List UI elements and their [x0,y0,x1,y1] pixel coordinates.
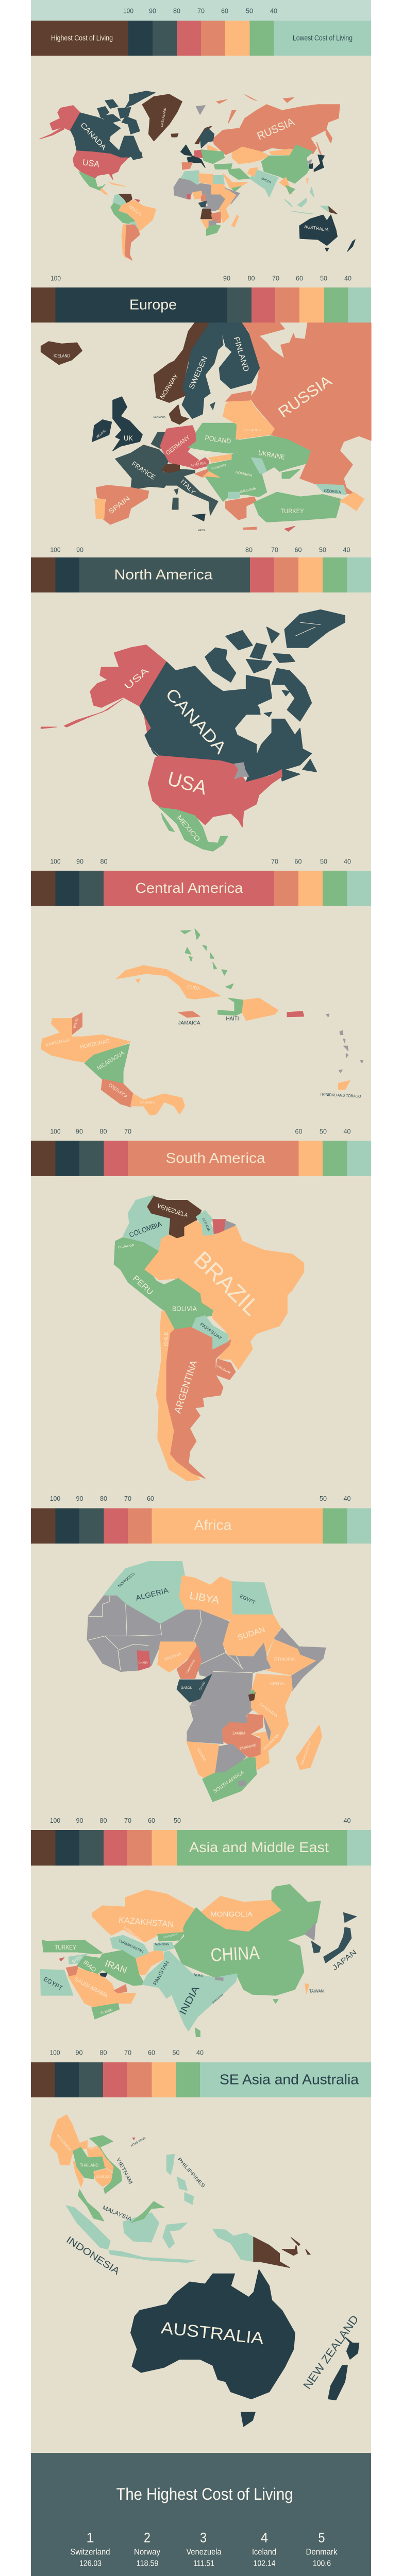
highest list row 1: Venezuela [187,2547,222,2556]
highest list row 1: 102.14 [254,2560,276,2568]
Central America country labels: JAMAICA [178,1020,200,1026]
Asia country labels: INDIA [178,1984,202,2016]
panel: the highest cost of living: The Highest Cost of Living [116,2485,293,2503]
section bar: North America: 40 [343,546,350,553]
Europe country labels: NORWAY [158,372,180,400]
Europe country labels: SWEDEN [187,355,209,390]
SE Asia and Australia countries [66,2201,359,2427]
SE Asia and Australia labels: VIETNAM [115,2157,133,2185]
Asia country labels: SAUDI ARABIA [73,1976,109,1999]
section bar: North America [31,546,371,592]
Asia country labels: TAIWAN [309,1989,324,1994]
section bar: Central America [31,857,371,906]
map: Central America [41,929,363,1115]
world country labels: BRAZIL [128,205,143,217]
world country labels: GREENLAND [161,107,167,127]
section bar: North America: 50 [319,546,326,553]
Central America country labels: COSTA RICA [108,1082,128,1099]
section bar: Africa: 50 [320,1495,327,1502]
South America country labels [118,1202,265,1415]
South America country labels: VENEZUELA [156,1202,189,1219]
Africa country labels: CAMEROON [186,1659,196,1674]
SE Asia and Australia labels [56,2134,361,2392]
world country labels: AUSTRALIA [304,224,329,232]
legend: colour bar: Highest Cost of Living [51,34,113,42]
Africa country labels: ZIMBABWE [239,1743,257,1751]
SE Asia and Australia labels: AUSTRALIA [160,2318,264,2348]
South America country labels: BRAZIL [189,1246,265,1321]
South America country labels: CHILE [164,1332,169,1346]
Europe country labels: UKRAINE [258,449,286,461]
Asia country labels: EGYPT [42,1975,64,1992]
section bar: Africa [31,1495,371,1544]
South America country labels: ARGENTINA [172,1359,200,1415]
legend: top scale numbers: 80 [173,7,180,14]
map: South America [114,1195,304,1481]
section bar: Central America: 100 [51,857,61,866]
SE Asia and Australia labels: MYANMAR [56,2134,72,2153]
map: Africa [87,1562,326,1802]
section bar: South America: 50 [320,1127,327,1136]
section bar: North America: 90 [76,546,83,553]
Africa country labels: NAMIBIA [196,1748,207,1762]
Central America country labels: HONDURAS [79,1038,110,1050]
Europe country labels: SPAIN [107,495,131,515]
Africa country labels: MADAGASCAR [300,1741,312,1766]
section bar: Central America: 60 [295,857,302,866]
section bar: Asia and Middle East: Asia and Middle East [189,1839,329,1855]
section bar: Europe: 50 [320,274,327,282]
legend: colour bar [31,21,371,56]
Africa country labels: GHANA [139,1662,148,1665]
Central America country labels: PANAMA [140,1101,155,1105]
section bar: SE Asia and Australia: 50 [172,2048,179,2057]
section bar: SE Asia and Australia: 70 [124,2048,131,2057]
section bar: Central America: Central America [135,880,243,896]
SE Asia and Australia labels: CAMBODIA [96,2176,111,2179]
Europe country labels: UK [124,434,133,442]
map: world overview [40,91,355,260]
section bar: Africa: 80 [100,1495,107,1502]
Central America countries [41,929,363,1115]
panel: the highest cost of living [31,2453,371,2576]
Asia country labels [42,1910,358,2016]
North America country labels: CANADA [162,684,230,757]
Central America country labels: BELIZE [73,1017,79,1029]
Africa country labels: GABON [181,1687,192,1690]
South America country labels: PARAGUAY [199,1321,223,1341]
section bar: Central America: 90 [76,857,83,866]
world country labels [79,107,329,232]
Europe countries [41,323,371,531]
section bar: South America: 100 [51,1127,61,1136]
Central America country labels [45,984,361,1105]
Africa country labels: EGYPT [239,1594,256,1606]
section bar: Europe: 40 [344,274,351,282]
North America country labels: USA [123,666,150,691]
highest list row 1: 3 [200,2530,207,2545]
legend: top scale numbers: 90 [149,7,156,14]
section bar: South America: 40 [343,1127,350,1136]
SE Asia and Australia labels: INDONESIA [64,2234,122,2277]
Africa country labels: KENYA [270,1683,284,1686]
Asia country labels: KYRGYZSTAN [163,1933,178,1940]
section bar: Asia and Middle East: 100 [50,1817,60,1824]
Asia country labels: TAJIKISTAN [155,1943,169,1946]
Europe country labels: CZECH REP [194,451,211,455]
Europe country labels: HUNGARY [211,464,227,471]
South America country labels: ECUADOR [118,1244,135,1249]
Asia country labels: PAKISTAN [153,1960,170,1986]
highest list row 1: Iceland [252,2547,276,2556]
legend: colour bar: Lowest Cost of Living [293,34,353,42]
highest list row 1: Denmark [306,2547,338,2556]
Asia country labels: KAZAKHSTAN [118,1915,174,1929]
section bar: Europe: 70 [272,274,279,282]
Africa country labels: TANZANIA [258,1702,279,1718]
map: Asia and Middle East [41,1885,358,2221]
section bar: North America: 80 [245,546,253,553]
Europe country labels: RUSSIA [275,372,335,421]
South America country labels: GUYANA [201,1217,211,1232]
SE Asia and Australia labels: PHILIPPINES [176,2157,206,2189]
Europe country labels: GERMANY [164,434,191,456]
Central America country labels: TRINIDAD AND TOBAGO [320,1092,361,1099]
section bar: North America: 100 [51,546,61,553]
SE Asia and Australia labels: NEW ZEALAND [300,2313,361,2392]
section bar: Europe: 60 [296,274,303,282]
section bar: Asia and Middle East: 90 [76,1817,83,1824]
Asia country labels: YEMEN [100,2008,113,2015]
Europe country labels: BELARUS [244,429,261,432]
section bar: South America: South America [166,1150,265,1166]
section bar: SE Asia and Australia: 90 [75,2048,82,2057]
North America country labels: MEXICO [175,814,202,843]
map: SE Asia and Australia [56,2134,361,2427]
section bar: Asia and Middle East: 60 [148,1817,155,1824]
Europe country labels: FINLAND [232,336,250,373]
world country labels: INDIA [261,177,271,184]
section bar: Central America: 70 [271,857,278,866]
section bar: SE Asia and Australia: 100 [49,2048,60,2057]
Africa country labels [117,1571,312,1794]
highest list row 1: Switzerland [70,2547,110,2556]
Europe country labels: ITALY [179,478,197,496]
legend: top scale numbers: 40 [270,7,277,14]
section bar: Asia and Middle East: 80 [100,1817,107,1824]
section bar: Europe: Europe [129,297,177,312]
legend: top scale numbers: 60 [221,7,228,14]
section bar: South America: 80 [100,1127,107,1136]
highest list row 1: 2 [144,2530,150,2545]
section bar: North America: 60 [295,546,302,553]
Africa country labels: ZAMBIA [232,1732,246,1735]
section bar: North America: North America [114,567,213,582]
section bar: Europe: 90 [223,274,230,282]
Central America country labels: CUBA [187,984,200,991]
section bar: North America: 70 [271,546,278,553]
section bar: Asia and Middle East: 40 [343,1817,350,1824]
Asia country labels: SYRIA [71,1954,82,1964]
section bar: South America: 70 [124,1127,131,1136]
SE Asia and Australia labels: THAILAND [80,2163,98,2168]
section bar: Europe: 80 [247,274,255,282]
Europe country labels: BULGARIA [240,487,257,494]
Africa country labels: SOUTH AFRICA [212,1770,245,1794]
Asia country labels: UZBEKISTAN [123,1926,145,1945]
Africa country labels: CONGO [199,1681,206,1691]
section bar: Africa: 90 [76,1495,83,1502]
section bar: Africa: 70 [124,1495,131,1502]
Asia country labels: TURKEY [55,1944,76,1951]
Africa country labels: LIBYA [189,1590,221,1606]
Europe country labels: MALTA [198,529,205,532]
section bar: Central America: 80 [100,857,107,866]
section bar: Central America: 40 [344,857,351,866]
section bar: Africa: 40 [343,1495,350,1502]
section bar: Asia and Middle East [31,1817,371,1866]
Asia country labels: JAPAN [330,1948,358,1972]
North America countries [41,609,345,851]
legend: top scale numbers: 100 [123,7,133,14]
highest list row 1: 126.03 [79,2560,102,2568]
Asia country labels: MONGOLIA [210,1910,253,1918]
Europe country labels: IRELAND [96,429,107,439]
Europe country labels: DENMARK [154,416,166,419]
highest list row 1 [70,2530,338,2568]
section bar: Africa: 60 [147,1495,154,1502]
section bar: South America: 90 [76,1127,83,1136]
Europe country labels: ROMANIA [235,471,253,478]
Africa country labels: MOZAMBIQUE [263,1734,280,1751]
South America country labels: PERU [131,1274,155,1297]
Asia country labels: IRAN [104,1958,128,1976]
section bar: Europe [31,274,371,323]
Europe country labels: FRANCE [130,460,157,481]
Asia countries [41,1885,357,2221]
Asia country labels: CHINA [210,1942,260,1965]
section bar: South America: 60 [295,1127,302,1136]
map: North America [41,609,345,851]
North America country labels [123,666,230,843]
Europe country labels [54,336,341,532]
legend: top scale numbers [123,7,277,14]
Africa country labels: MOROCCO [117,1571,136,1588]
Europe country labels: TURKEY [280,507,304,515]
section bar: SE Asia and Australia [31,2048,371,2097]
section bar: Europe: 100 [51,274,61,282]
Africa country labels: SUDAN [237,1625,266,1642]
Central America country labels: HAITI [226,1016,239,1022]
map: Europe [41,323,371,532]
highest list row 1: 1 [86,2530,94,2545]
North America country labels: USA [165,768,209,799]
SE Asia and Australia labels: LAOS [88,2147,97,2150]
Central America country labels: GUATEMALA [45,1037,71,1047]
highest list row 1: 118.59 [136,2560,159,2568]
legend: top scale numbers: 50 [246,7,253,14]
Europe country labels: AUSTRIA [190,461,206,468]
Africa country labels: ETHIOPIA [274,1657,295,1662]
South America country labels: BOLIVIA [172,1304,197,1313]
highest list row 1: 100.6 [313,2560,331,2568]
highest list row 1: 5 [319,2530,325,2545]
highest list row 1: 111.51 [193,2560,214,2568]
Asia country labels: BANGLADESH [212,1993,224,2005]
highest list row 1: 4 [261,2530,268,2545]
South America countries [114,1195,304,1481]
section bar: South America [31,1127,371,1176]
Asia country labels: TURKMENISTAN [118,1939,144,1954]
SE Asia and Australia labels: MALAYSIA [102,2205,133,2223]
Africa country labels: NIGERIA [164,1651,183,1662]
South America country labels: COLOMBIA [128,1219,163,1239]
Africa countries [87,1562,326,1802]
section bar: SE Asia and Australia: 60 [148,2048,155,2057]
legend: top scale numbers: 70 [197,7,205,14]
section bar: Africa: 100 [50,1495,60,1502]
SE Asia and Australia labels: HONG KONG [130,2137,146,2148]
section bar: Africa: Africa [194,1517,232,1533]
Asia country labels: NEPAL [194,1973,204,1978]
world country labels: USA [82,157,100,170]
section bar: Asia and Middle East: 50 [174,1817,181,1824]
highest list row 1: Norway [134,2547,160,2556]
section bar: SE Asia and Australia: SE Asia and Australia [220,2071,359,2088]
SE Asia mainland countries [50,2115,194,2221]
Central America country labels: NICARAGUA [96,1050,126,1072]
Europe country labels: ICELAND [54,353,70,359]
Europe country labels: GEORGIA [324,488,341,495]
Africa country labels: ALGERIA [135,1586,170,1602]
section bar: Central America: 50 [320,857,327,866]
South America country labels: URUGUAY [216,1365,231,1375]
section bar: Asia and Middle East: 70 [124,1817,131,1824]
Asia country labels: IRAQ [82,1959,97,1973]
section bar: SE Asia and Australia: 40 [196,2048,204,2057]
world country labels: CANADA [79,121,108,151]
Europe country labels: POLAND [205,434,231,445]
world country labels: RUSSIA [256,116,296,142]
world countries [40,91,355,260]
section bar: SE Asia and Australia: 80 [100,2048,107,2057]
